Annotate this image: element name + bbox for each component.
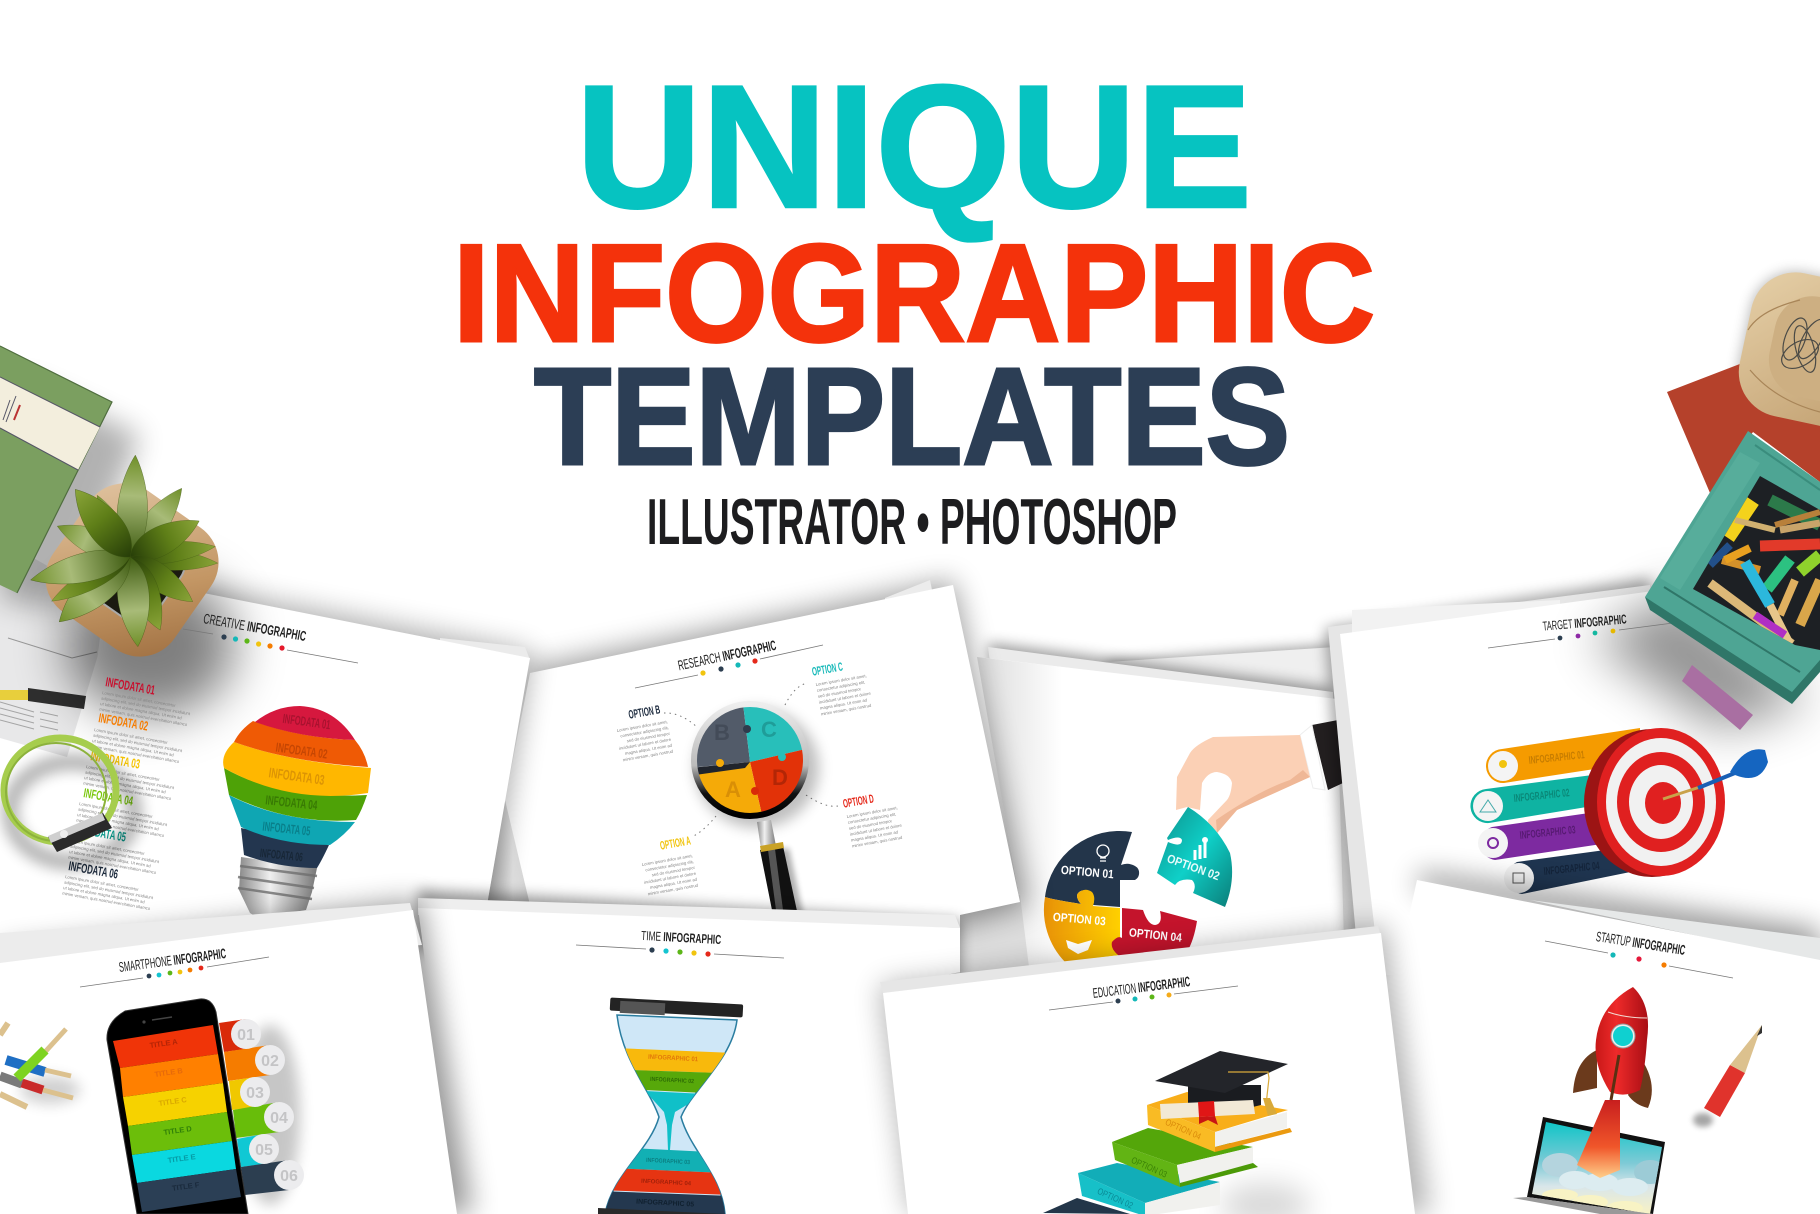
pencil box <box>1645 431 1820 704</box>
connector dotted lines <box>664 683 838 837</box>
phone number badges: 05 <box>255 1142 273 1159</box>
option B text: minim veniam, quis nostrud <box>622 748 674 762</box>
infodata 04 text: adipiscing elit, sed do eiusmod tempor incididunt <box>78 807 168 827</box>
panel: startup page shadow <box>1417 872 1820 970</box>
dart <box>1663 749 1768 799</box>
eraser <box>1682 665 1753 730</box>
option C text: OPTION C <box>811 659 844 679</box>
back sheets behind puzzle page <box>988 643 1340 975</box>
bar 3 infographic 03 <box>1478 810 1615 860</box>
target <box>1584 728 1725 877</box>
option A text: OPTION A <box>659 833 692 853</box>
puzzle: option 01 piece: OPTION 01 <box>1060 863 1115 881</box>
infodata 01 text: minim veniam, quis nostrud exercitation ullamco <box>99 707 188 727</box>
puzzle: option 02 piece: OPTION 02 <box>1165 851 1222 883</box>
smartphone: TITLE E <box>167 1152 196 1165</box>
books shadow <box>1220 1183 1310 1214</box>
option A text: minim veniam, quis nostrud <box>647 882 699 896</box>
target title: TARGET INFOGRAPHIC <box>1542 611 1627 634</box>
hourglass: INFOGRAPHIC 05 <box>636 1198 694 1209</box>
option B text <box>615 702 674 763</box>
light bulb chart: INFODATA 01 <box>282 711 331 732</box>
phone number badges: 04 <box>270 1110 288 1127</box>
infodata 04 text: Lorem ipsum dolor sit amet, consectetur <box>79 801 154 819</box>
smartphone: TITLE B <box>154 1066 184 1079</box>
option B text: incididunt ut labore et dolore <box>619 737 672 751</box>
infodata 06 text: INFODATA 06 <box>67 858 119 882</box>
infodata 06 text <box>62 858 155 911</box>
option A text <box>640 833 699 897</box>
time title: TIME INFOGRAPHIC <box>641 928 722 947</box>
infodata 05 text: Lorem ipsum dolor sit amet, consectetur <box>71 838 146 856</box>
watch shadow <box>10 762 134 862</box>
light bulb chart: INFODATA 04 <box>265 792 319 813</box>
decorative wedge under research page <box>487 800 530 905</box>
smartphone title <box>80 945 269 987</box>
option C text: minim veniam, quis nostrud <box>821 703 872 717</box>
magnifying glass <box>690 695 819 927</box>
option C text: magna aliqua. Ut enim ad <box>819 697 868 711</box>
hourglass: INFOGRAPHIC 02 <box>650 1077 695 1085</box>
phone number badges: 03 <box>246 1085 264 1102</box>
infodata 04 text <box>76 785 169 838</box>
puzzle: option 04 piece: OPTION 04 <box>1128 925 1183 945</box>
infodata 02 text: Lorem ipsum dolor sit amet, consectetur <box>94 727 169 745</box>
panel: startup page <box>1390 880 1820 1214</box>
option D text: consectetur adipiscing elit, <box>847 811 897 825</box>
infodata 05 text: adipiscing elit, sed do eiusmod tempor incididunt <box>70 844 160 864</box>
title line: templates: TEMPLATES <box>534 340 1290 494</box>
puzzle: option 03 piece <box>1044 890 1120 962</box>
smartphone: TITLE C <box>158 1095 188 1108</box>
option B text: magna aliqua. Ut enim ad <box>624 743 673 756</box>
infodata 05 text: minim veniam, quis nostrud exercitation ullamco <box>68 855 157 875</box>
smartphone <box>107 999 248 1214</box>
phone number badges <box>231 1019 304 1190</box>
smartphone: TITLE A <box>149 1037 179 1050</box>
title line: infographic: INFOGRAPHIC <box>453 216 1375 371</box>
infodata 05 text: ut labore et dolore magna aliqua. Ut enim ad <box>69 849 152 868</box>
infodata 03 text <box>83 748 176 801</box>
stationery: envelope <box>0 540 108 757</box>
infodata 04 text: ut labore et dolore magna aliqua. Ut enim ad <box>77 812 160 831</box>
stack of books: OPTION 03 <box>1130 1155 1169 1180</box>
panel: target page <box>1340 590 1820 975</box>
hourglass <box>598 998 743 1214</box>
infodata 02 text: ut labore et dolore magna aliqua. Ut enim ad <box>92 738 175 757</box>
panel: creative page <box>58 573 530 935</box>
infodata 05 text <box>68 821 161 875</box>
rocket flame <box>1577 1100 1620 1178</box>
light bulb chart: INFODATA 06 <box>259 846 304 864</box>
magnifying glass: A <box>725 777 741 802</box>
green notebook <box>0 346 112 593</box>
magnifying glass: D <box>772 765 788 790</box>
light bulb chart: INFODATA 03 <box>268 764 326 788</box>
hourglass: INFOGRAPHIC 01 <box>648 1054 699 1063</box>
option B text: consectetur adipiscing elit, <box>620 725 669 738</box>
option A text: consectetur adipiscing elit, <box>645 859 694 872</box>
puzzle: option 02 piece <box>1157 807 1232 907</box>
bar 4 infographic 04: INFOGRAPHIC 04 <box>1543 860 1601 878</box>
loose pencils <box>0 1023 80 1107</box>
phone number badges: 01 <box>237 1027 255 1044</box>
option C text: incididunt ut labore et dolore <box>818 691 872 705</box>
infodata 06 text: adipiscing elit, sed do eiusmod tempor incididunt <box>64 880 154 900</box>
stack of books <box>1043 1092 1292 1214</box>
smartphone title: SMARTPHONE INFOGRAPHIC <box>118 945 227 975</box>
title line: unique: UNIQUE <box>576 50 1252 245</box>
infodata 06 text: ut labore et dolore magna aliqua. Ut enim ad <box>63 885 146 904</box>
option B text: Lorem ipsum dolor sit amet, <box>616 719 668 733</box>
infodata 02 text: INFODATA 02 <box>97 710 149 734</box>
infodata 03 text: Lorem ipsum dolor sit amet, consectetur <box>86 764 161 782</box>
panel: education page shadow <box>880 925 1430 1214</box>
panel: smartphone page <box>0 903 457 1214</box>
rocket <box>1573 987 1652 1108</box>
graduation cap and diploma <box>1155 1051 1288 1125</box>
option C text <box>811 659 874 717</box>
stack of books: OPTION 02 <box>1096 1186 1135 1211</box>
infodata 02 text: adipiscing elit, sed do eiusmod tempor incididunt <box>93 733 183 753</box>
infodata 01 text: INFODATA 01 <box>104 674 156 698</box>
option D text: OPTION D <box>842 791 875 811</box>
option D text <box>842 791 905 849</box>
time title <box>576 928 784 958</box>
infodata 01 text: Lorem ipsum dolor sit amet, consectetur <box>102 690 177 708</box>
creative title <box>183 610 358 663</box>
option A text: magna aliqua. Ut enim ad <box>649 877 698 890</box>
option A text: incididunt ut labore et dolore <box>644 871 697 885</box>
wooden dish <box>1667 264 1820 493</box>
smartphone: TITLE F <box>171 1180 200 1193</box>
infodata 06 text: minim veniam, quis nostrud exercitation ullamco <box>62 891 151 911</box>
icon: hand holding puzzle piece <box>1176 720 1343 837</box>
option C text: Lorem ipsum dolor sit amet, <box>815 673 867 687</box>
panel: creative page shadow <box>110 578 532 930</box>
infodata 02 text: minim veniam, quis nostrud exercitation ullamco <box>91 744 180 764</box>
startup title <box>1545 928 1733 978</box>
option A text: Lorem ipsum dolor sit amet, <box>641 853 693 867</box>
infodata 01 text: ut labore et dolore magna aliqua. Ut enim ad <box>100 701 183 720</box>
light bulb chart <box>223 706 371 918</box>
research title <box>635 637 823 688</box>
infodata 01 text: adipiscing elit, sed do eiusmod tempor incididunt <box>101 696 191 716</box>
panel: time page back strip and shadow <box>418 890 960 980</box>
bar 4 infographic 04 <box>1504 848 1650 894</box>
education title <box>1049 973 1238 1010</box>
phone tabs <box>219 1019 300 1205</box>
infodata 03 text: INFODATA 03 <box>89 748 141 772</box>
shadow of plant pot <box>65 573 235 717</box>
laptop <box>1513 1117 1666 1214</box>
infodata 02 text <box>91 710 184 764</box>
infodata 04 text: minim veniam, quis nostrud exercitation ullamco <box>76 818 165 838</box>
phone number badges: 02 <box>261 1053 279 1070</box>
plant leaves <box>27 454 219 648</box>
phone number badges: 06 <box>280 1168 298 1185</box>
infodata 04 text: INFODATA 04 <box>82 785 135 809</box>
panel: smartphone page shadow <box>0 900 472 1214</box>
infodata 01 text <box>99 674 192 727</box>
smartphone: TITLE D <box>163 1124 193 1137</box>
bar 2 infographic 02: INFOGRAPHIC 02 <box>1513 787 1570 805</box>
option C text: sed do eiusmod tempor <box>817 686 862 699</box>
bar 3 infographic 03: INFOGRAPHIC 03 <box>1519 824 1576 842</box>
panel: research page <box>505 580 1020 945</box>
notebook shadow <box>0 380 140 610</box>
option D text: sed do eiusmod tempor <box>848 818 893 831</box>
infodata 03 text: minim veniam, quis nostrud exercitation ullamco <box>83 781 172 801</box>
puzzle: option 01 piece <box>1045 831 1139 907</box>
magnifying glass: B <box>714 720 730 745</box>
panel: puzzle page <box>960 657 1345 975</box>
panel: target page back sheets <box>1325 578 1660 980</box>
hourglass: INFOGRAPHIC 03 <box>646 1158 691 1166</box>
bar 1 infographic 01: INFOGRAPHIC 01 <box>1528 749 1585 767</box>
pencil <box>1693 1025 1762 1127</box>
option D text: Lorem ipsum dolor sit amet, <box>846 805 898 819</box>
education title: EDUCATION INFOGRAPHIC <box>1092 973 1191 1001</box>
startup title: STARTUP INFOGRAPHIC <box>1595 928 1686 958</box>
research title: RESEARCH INFOGRAPHIC <box>676 637 778 673</box>
shadow of pencil box on page <box>1590 590 1810 730</box>
icon: smart watch <box>4 738 116 852</box>
infodata 06 text: Lorem ipsum dolor sit amet, consectetur <box>65 874 140 892</box>
option A text: sed do eiusmod tempor <box>651 865 696 877</box>
bar 2 infographic 02 <box>1470 774 1605 823</box>
plant pot <box>29 467 235 673</box>
option B text: sed do eiusmod tempor <box>626 731 671 743</box>
light bulb chart: INFODATA 02 <box>275 739 328 762</box>
infodata 03 text: ut labore et dolore magna aliqua. Ut enim ad <box>84 775 167 794</box>
creative title: CREATIVE INFOGRAPHIC <box>202 610 307 644</box>
stack of books: OPTION 04 <box>1164 1117 1203 1142</box>
panel: time page <box>418 908 960 1214</box>
option D text: incididunt ut labore et dolore <box>849 823 903 837</box>
puzzle: option 03 piece: OPTION 03 <box>1052 910 1107 928</box>
subtitle: ILLUSTRATOR • PHOTOSHOP <box>647 485 1177 558</box>
panel: research page shadow <box>520 580 1028 925</box>
bar 1 infographic 01 <box>1486 728 1640 783</box>
option B text: OPTION B <box>627 702 661 722</box>
puzzle: option 04 piece <box>1112 908 1197 958</box>
light bulb chart: INFODATA 05 <box>262 819 311 838</box>
target title <box>1488 611 1673 648</box>
option D text: magna aliqua. Ut enim ad <box>850 829 899 843</box>
option D text: minim veniam, quis nostrud <box>852 835 903 849</box>
hourglass: INFOGRAPHIC 04 <box>641 1179 692 1187</box>
infodata 03 text: adipiscing elit, sed do eiusmod tempor incididunt <box>85 770 175 790</box>
magnifying glass: C <box>761 717 777 742</box>
panel: education page <box>880 926 1415 1214</box>
infodata 05 text: INFODATA 05 <box>75 821 127 845</box>
option C text: consectetur adipiscing elit, <box>816 679 866 693</box>
